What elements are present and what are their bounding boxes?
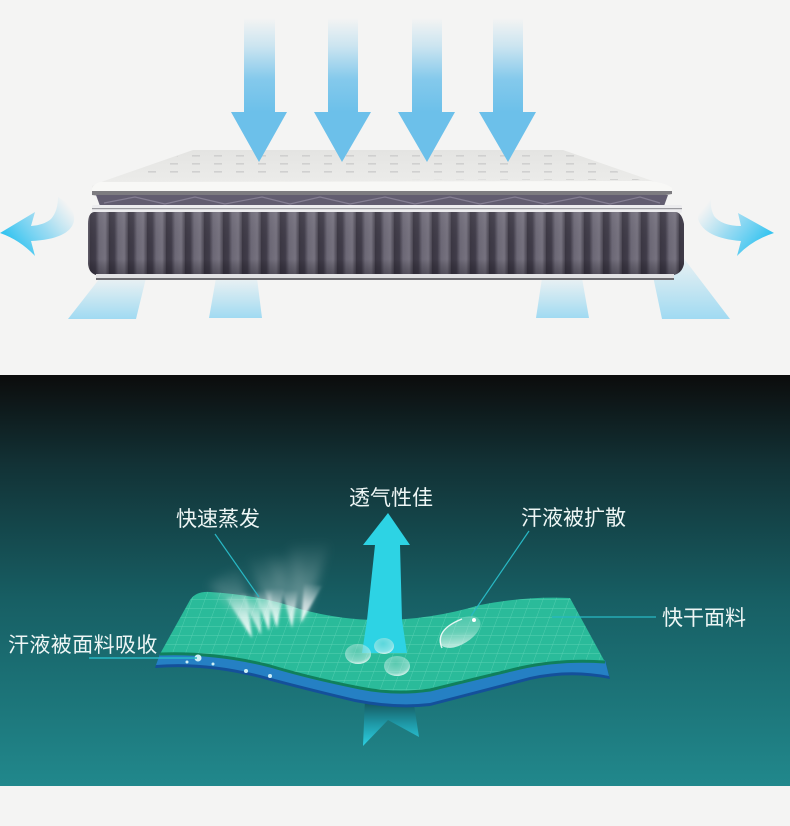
bottom border tape [96, 274, 674, 278]
panel: dark teal fabric diagram [0, 375, 790, 786]
arrow: down 2 [314, 18, 371, 162]
fabric: green top layer [160, 592, 606, 694]
label: quick-dry fabric: 快干面料 [662, 607, 746, 630]
leader line: evaporation [215, 534, 259, 597]
icon: floor airflow beams [68, 256, 730, 319]
label: breathable: 透气性佳 [349, 487, 433, 510]
mattress top surface [92, 150, 672, 192]
steam vapor [208, 540, 332, 638]
arrow: curved left [0, 197, 74, 256]
white border tape [92, 205, 682, 213]
water droplets [345, 610, 486, 676]
arrow: down 3 [398, 18, 455, 162]
quilted band [96, 195, 668, 206]
arrow: down 1 [231, 18, 287, 162]
arrow: down 4 [479, 18, 536, 162]
leader line: diffusion [471, 531, 529, 616]
arrow: upward airflow [362, 513, 410, 653]
pillow top piping [92, 191, 672, 196]
panel: light background with mattress [0, 0, 790, 375]
fabric: blue lower layer [155, 654, 610, 707]
label: sweat diffusion: 汗液被扩散 [521, 507, 626, 530]
leader line: absorption [89, 657, 197, 659]
label: fast evaporation: 快速蒸发 [176, 508, 260, 531]
label: sweat absorbed by fabric: 汗液被面料吸收 [8, 634, 158, 657]
absorbed sweat specks [186, 654, 272, 678]
leader line: fabric [552, 616, 656, 618]
mattress [88, 150, 684, 280]
ribbed side panel [88, 212, 684, 275]
arrow: curved right [698, 197, 774, 256]
arrow: lower airflow tail [363, 698, 419, 746]
